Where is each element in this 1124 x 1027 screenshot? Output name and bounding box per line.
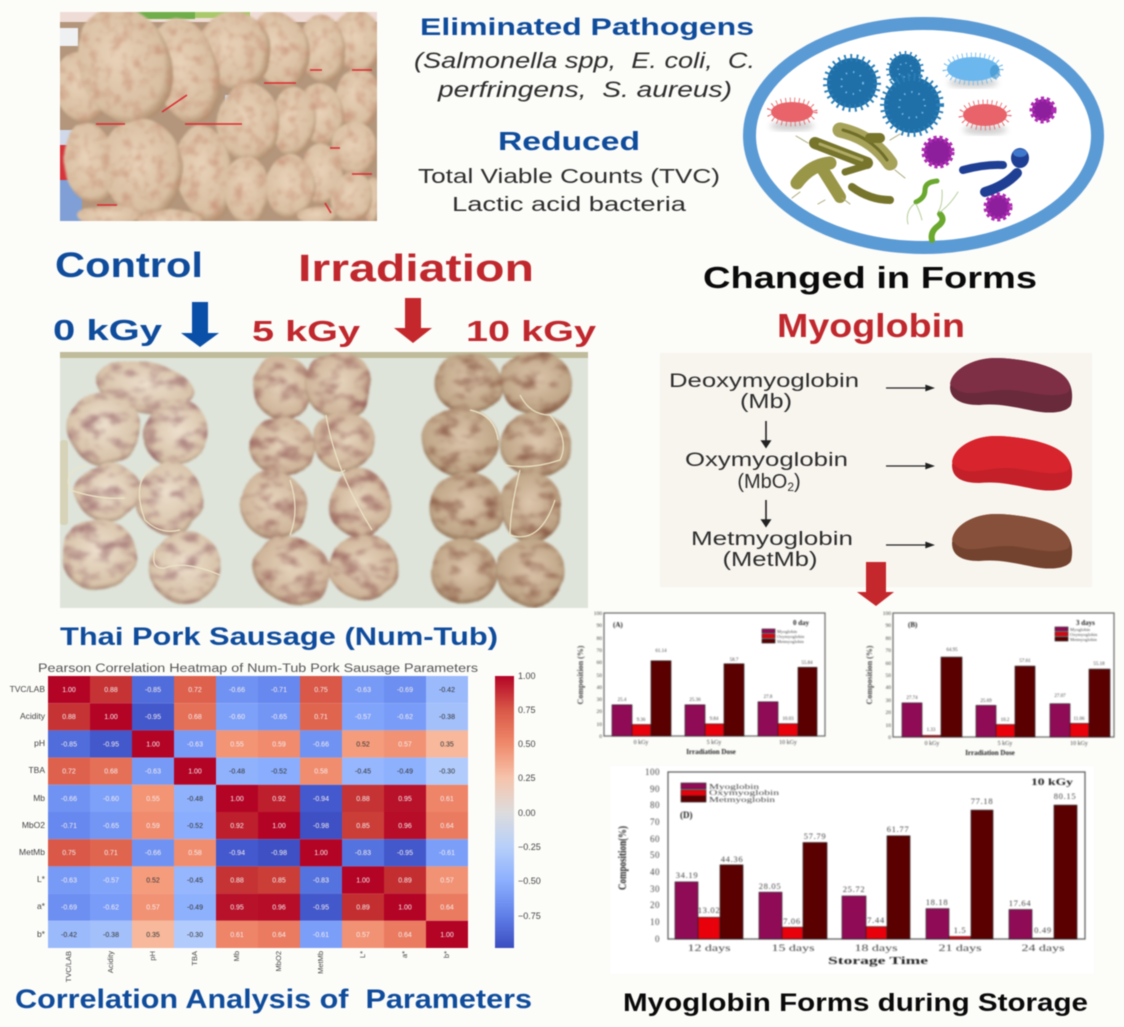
chart: correlation heatmap: 1.00 — [314, 850, 328, 857]
arrow: red down — [394, 298, 432, 343]
chart D: storage time composition: 24 days — [1022, 943, 1065, 953]
heatmap colour bar legend: 0.50 — [518, 739, 536, 749]
icon: dark blue bacteria — [963, 148, 1029, 192]
chart D: storage time composition: 25.72 — [843, 884, 865, 894]
label: 10 kGy: 10 kGy — [466, 316, 596, 348]
icon: red viruses — [770, 102, 1007, 135]
chart D: storage time composition: 61.77 — [887, 824, 909, 834]
chart B: 3 days composition: 60 — [886, 661, 891, 667]
chart D: storage time composition: 80.15 — [1054, 791, 1076, 801]
chart B: 3 days composition: 25.69 — [980, 699, 992, 704]
chart B: 3 days composition: 70 — [886, 648, 891, 654]
heading: myoglobin forms during storage: Myoglobin Forms during Storage — [623, 989, 1088, 1017]
heatmap colour bar legend: 0.00 — [518, 808, 536, 818]
heading: reduced text block: Reduced — [498, 126, 640, 156]
chart A: 0 day composition: 70 — [596, 648, 602, 654]
chart: correlation heatmap: -0.52 — [271, 769, 287, 776]
chart B: 3 days composition: 0 — [888, 735, 891, 741]
chart: correlation heatmap: -0.52 — [187, 823, 203, 830]
arrow: Mb to MbO2 — [762, 421, 770, 447]
heatmap row labels: Mb — [33, 793, 45, 803]
heatmap colour bar legend: 1.00 — [518, 671, 536, 681]
chart A: 0 day composition: 25.36 — [689, 698, 701, 703]
chart: correlation heatmap: -0.65 — [271, 714, 287, 721]
chart A: 0 day composition: 9.84 — [710, 717, 719, 722]
chart: correlation heatmap: -0.65 — [103, 823, 119, 830]
icon: red meat cut — [952, 436, 1072, 491]
chart: correlation heatmap: -0.48 — [187, 796, 203, 803]
chart A: 0 day composition: 5 kGy — [707, 740, 721, 746]
chart: correlation heatmap: 0.72 — [188, 687, 202, 694]
chart: correlation heatmap: -0.95 — [103, 741, 119, 748]
heatmap colour bar legend: 0.75 — [518, 705, 536, 715]
chart B: 3 days composition: 80 — [886, 636, 891, 642]
heatmap column labels: a* — [400, 951, 409, 958]
chart: correlation heatmap: 0.55 — [230, 741, 244, 748]
heatmap column labels: pH — [148, 951, 157, 961]
chart A: 0 day composition: 20 — [596, 709, 602, 715]
heatmap colour bar legend: −0.75 — [518, 911, 541, 921]
chart D: storage time composition: 70 — [650, 817, 660, 827]
photo: sausages on board at three doses — [60, 351, 588, 618]
chart D: storage time composition: 12 days — [688, 943, 731, 953]
chart B: 3 days composition: 30 — [886, 698, 891, 704]
heading: eliminated pathogens text block: Eliminated Pathogens — [420, 14, 754, 41]
heatmap column labels: MetMb — [316, 951, 325, 974]
chart: correlation heatmap: 0.89 — [398, 877, 412, 884]
chart: correlation heatmap: 1.00 — [440, 932, 454, 939]
chart: correlation heatmap: -0.61 — [313, 932, 329, 939]
chart B: 3 days composition: 10.2 — [1001, 718, 1010, 723]
chart A: 0 day composition: 10 — [596, 722, 602, 728]
label: metmyoglobin: Metmyoglobin — [691, 529, 853, 550]
chart D: storage time composition: 13.02 — [698, 905, 720, 915]
chart: correlation heatmap: 1.00 — [188, 769, 202, 776]
chart: correlation heatmap: -0.83 — [355, 850, 371, 857]
chart B: 3 days composition: 40 — [886, 685, 891, 691]
chart: correlation heatmap: -0.63 — [61, 877, 77, 884]
heading: eliminated pathogens text block: perfringens, S. aureus) — [437, 77, 732, 102]
legend B — [1055, 627, 1098, 642]
heatmap row labels: b* — [37, 929, 46, 939]
chart: correlation heatmap: -0.57 — [355, 714, 371, 721]
heading: correlation analysis: Correlation Analysis of Parameters — [15, 984, 532, 1014]
chart A: 0 day composition: 10.03 — [782, 717, 794, 722]
legend A: Metmyoglobin — [777, 639, 804, 644]
chart: correlation heatmap: -0.48 — [229, 769, 245, 776]
chart: correlation heatmap: 0.88 — [104, 687, 118, 694]
chart: correlation heatmap: 1.00 — [272, 823, 286, 830]
chart: correlation heatmap: -0.30 — [439, 769, 455, 776]
chart A: 0 day composition: 60 — [596, 660, 602, 666]
chart A: 0 day composition: (A) — [613, 621, 623, 629]
chart A: 0 day composition: 25.4 — [618, 698, 627, 703]
chart B: 3 days composition: 55.18 — [1093, 662, 1105, 667]
chart: correlation heatmap: -0.71 — [61, 823, 77, 830]
chart D: storage time composition: 18 days — [854, 943, 898, 953]
chart D: storage time composition: 7.06 — [783, 916, 801, 926]
chart: correlation heatmap: 0.71 — [314, 714, 328, 721]
chart D: storage time composition: 80 — [650, 800, 660, 810]
chart A: 0 day composition: 27.8 — [764, 695, 773, 700]
icon: purple viruses — [924, 99, 1054, 219]
icon: olive bacteria — [792, 130, 905, 204]
chart: correlation heatmap: -0.98 — [313, 823, 329, 830]
chart: correlation heatmap: 0.88 — [62, 714, 76, 721]
chart: correlation heatmap: -0.62 — [103, 905, 119, 912]
label: oxymyoglobin: Oxymyoglobin — [685, 450, 848, 471]
chart: correlation heatmap: -0.66 — [145, 850, 161, 857]
heatmap colour bar legend — [495, 671, 541, 948]
chart: correlation heatmap: -0.60 — [229, 714, 245, 721]
legend A: Myoglobin — [777, 629, 798, 634]
chart D: storage time composition: 90 — [650, 784, 660, 794]
chart D: storage time composition — [610, 766, 1094, 974]
chart: correlation heatmap: -0.45 — [355, 769, 371, 776]
chart: correlation heatmap: 1.00 — [62, 687, 76, 694]
chart: correlation heatmap: 0.52 — [356, 741, 370, 748]
chart: correlation heatmap: 0.95 — [230, 905, 244, 912]
legend D — [681, 783, 780, 804]
chart: correlation heatmap: 0.55 — [146, 796, 160, 803]
sausages: 10 kGy — [423, 351, 572, 606]
heatmap row labels: TBA — [28, 765, 45, 775]
chart: correlation heatmap: -0.71 — [271, 687, 287, 694]
chart D: storage time composition: 17.64 — [1009, 898, 1031, 908]
heatmap column labels: TVC/LAB — [64, 951, 73, 982]
chart A: 0 day composition: Composition (%) — [576, 645, 585, 704]
label: control: Control — [55, 246, 203, 285]
chart: correlation heatmap: -0.30 — [187, 932, 203, 939]
heatmap column labels: L* — [358, 951, 367, 958]
chart: correlation heatmap: 1.00 — [146, 741, 160, 748]
heatmap column labels: Mb — [232, 951, 241, 961]
chart: correlation heatmap: -0.49 — [397, 769, 413, 776]
label: 5 kGy: 5 kGy — [252, 316, 360, 348]
chart B: 3 days composition: 10 kGy — [1070, 741, 1088, 747]
chart: correlation heatmap: 0.57 — [398, 741, 412, 748]
chart B: 3 days composition: 90 — [886, 623, 891, 629]
chart D: storage time composition: 30 — [650, 884, 660, 894]
heatmap row labels — [10, 684, 46, 939]
icon: blue viruses — [827, 54, 940, 133]
chart: correlation heatmap: -0.95 — [397, 850, 413, 857]
chart: correlation heatmap: -0.49 — [187, 905, 203, 912]
chart B: 3 days composition — [865, 611, 1114, 757]
chart A: 0 day composition: 80 — [596, 636, 602, 642]
arrow: blue down — [181, 302, 219, 347]
label: metmyoglobin — [691, 529, 853, 571]
heatmap title: Pearson Correlation Heatmap of Num-Tub Pork Sausage Parameters — [38, 663, 478, 675]
chart: correlation heatmap: -0.66 — [229, 687, 245, 694]
chart D: storage time composition: 15 days — [772, 943, 815, 953]
label: deoxymyoglobin — [669, 371, 859, 413]
chart B: 3 days composition: Irradiation Dose — [965, 749, 1015, 757]
chart: correlation heatmap: 0.61 — [440, 796, 454, 803]
chart A: 0 day composition: 100 — [594, 611, 602, 617]
chart A: 0 day composition: 61.14 — [655, 649, 667, 654]
label: oxymyoglobin: (MbO — [737, 471, 787, 493]
chart: correlation heatmap: 1.00 — [104, 714, 118, 721]
chart: correlation heatmap: 0.58 — [188, 850, 202, 857]
legend D: Myoglobin — [709, 783, 760, 791]
chart: correlation heatmap: 0.64 — [398, 932, 412, 939]
chart: correlation heatmap: 0.57 — [356, 932, 370, 939]
chart A: 0 day composition: 0 kGy — [634, 740, 648, 746]
icon: brown meat cut — [952, 514, 1072, 569]
label: irradiation: Irradiation — [298, 248, 534, 290]
chart: correlation heatmap: 0.72 — [62, 769, 76, 776]
chart D: storage time composition: 0.49 — [1034, 925, 1052, 935]
chart B: 3 days composition: 64.95 — [946, 648, 958, 653]
icon: light blue virus — [947, 57, 1000, 88]
heatmap colour bar legend: −0.50 — [518, 876, 541, 886]
chart B: 3 days composition: 0 kGy — [925, 741, 939, 747]
chart: correlation heatmap: 0.59 — [272, 741, 286, 748]
chart: correlation heatmap: -0.63 — [145, 769, 161, 776]
chart: correlation heatmap: 0.75 — [314, 687, 328, 694]
chart: correlation heatmap: 0.68 — [104, 769, 118, 776]
chart D: storage time composition: 0 — [655, 934, 660, 944]
chart: correlation heatmap: 0.58 — [314, 769, 328, 776]
heatmap colour bar legend: 0.25 — [518, 773, 536, 783]
icon: green flagellated bacteria — [907, 181, 958, 240]
heatmap column labels — [64, 951, 451, 982]
sausages: control — [61, 354, 221, 604]
chart: correlation heatmap: -0.94 — [229, 850, 245, 857]
heading: reduced text block — [418, 126, 720, 216]
chart: correlation heatmap: 0.64 — [440, 905, 454, 912]
chart B: 3 days composition: (B) — [908, 621, 918, 629]
label: oxymyoglobin: 2 — [787, 480, 794, 494]
chart: correlation heatmap: 0.85 — [272, 877, 286, 884]
chart A: 0 day composition: 90 — [596, 623, 602, 629]
heatmap row labels: MetMb — [19, 847, 45, 857]
chart: correlation heatmap: -0.85 — [61, 741, 77, 748]
chart B: 3 days composition: 27.74 — [906, 696, 918, 701]
chart: correlation heatmap: -0.63 — [355, 687, 371, 694]
heatmap row labels: TVC/LAB — [10, 684, 45, 694]
chart: correlation heatmap: 0.85 — [356, 823, 370, 830]
chart B: 3 days composition: 57.61 — [1019, 659, 1031, 664]
chart: correlation heatmap: 0.61 — [230, 932, 244, 939]
heatmap column labels: TBA — [190, 951, 199, 966]
chart: correlation heatmap: -0.66 — [313, 741, 329, 748]
chart: correlation heatmap: -0.38 — [103, 932, 119, 939]
chart B: 3 days composition: 11.06 — [1073, 717, 1085, 722]
heatmap row labels: pH — [34, 738, 45, 748]
chart D: storage time composition: 20 — [650, 900, 660, 910]
chart: correlation heatmap: -0.62 — [397, 714, 413, 721]
legend A — [762, 629, 805, 644]
chart: correlation heatmap — [48, 676, 468, 948]
heatmap row labels: Acidity — [20, 711, 46, 721]
heatmap row labels: a* — [37, 901, 46, 911]
chart: correlation heatmap: -0.83 — [313, 877, 329, 884]
chart B: 3 days composition: 27.07 — [1054, 694, 1066, 699]
chart: correlation heatmap: -0.45 — [187, 877, 203, 884]
legend D: Oxymyoglobin — [709, 789, 780, 797]
chart: correlation heatmap: 0.59 — [146, 823, 160, 830]
chart: correlation heatmap: 0.71 — [104, 850, 118, 857]
chart: correlation heatmap: 0.52 — [146, 877, 160, 884]
chart: correlation heatmap: -0.94 — [313, 796, 329, 803]
chart D: storage time composition: 1.5 — [954, 925, 966, 935]
chart: correlation heatmap: -0.60 — [103, 796, 119, 803]
chart A: 0 day composition — [576, 611, 825, 756]
label: deoxymyoglobin: (Mb) — [740, 391, 792, 413]
heatmap column labels: MbO2 — [274, 951, 283, 971]
chart A: 0 day composition: Irradiation Dose — [686, 748, 736, 756]
heading: myoglobin: Myoglobin — [777, 307, 965, 344]
chart D: storage time composition: 100 — [645, 767, 660, 777]
legend A: Oxymyoglobin — [777, 634, 805, 639]
chart D: storage time composition: 10 kGy — [1031, 777, 1074, 787]
chart B: 3 days composition: 50 — [886, 673, 891, 679]
chart: correlation heatmap: 0.35 — [440, 741, 454, 748]
chart: correlation heatmap: 0.95 — [398, 796, 412, 803]
arrows: form to meat colour — [886, 386, 933, 548]
bars A — [612, 661, 817, 736]
chart B: 3 days composition: 20 — [886, 710, 891, 716]
chart A: 0 day composition: 10 kGy — [779, 740, 797, 746]
chart B: 3 days composition: 1.33 — [927, 728, 936, 733]
chart: correlation heatmap: 0.75 — [62, 850, 76, 857]
chart D: storage time composition: 44.36 — [721, 854, 743, 864]
chart: correlation heatmap: -0.61 — [439, 850, 455, 857]
panel: myoglobin forms — [660, 353, 1092, 587]
chart D: storage time composition: 40 — [650, 867, 660, 877]
chart: correlation heatmap: -0.85 — [145, 687, 161, 694]
chart: correlation heatmap: 0.64 — [440, 823, 454, 830]
heatmap row labels: MbO2 — [22, 820, 45, 830]
chart: correlation heatmap: 0.88 — [230, 877, 244, 884]
chart A: 0 day composition: 0 day — [793, 619, 810, 627]
chart: correlation heatmap: 0.88 — [356, 796, 370, 803]
chart: correlation heatmap: 0.35 — [146, 932, 160, 939]
chart: correlation heatmap: -0.63 — [187, 741, 203, 748]
heatmap colour bar legend: −0.25 — [518, 842, 541, 852]
arrow: red down to charts — [857, 562, 894, 606]
chart: correlation heatmap: 0.57 — [146, 905, 160, 912]
chart: correlation heatmap: -0.98 — [271, 850, 287, 857]
heatmap row labels: L* — [37, 874, 46, 884]
chart B: 3 days composition: 5 kGy — [998, 741, 1012, 747]
chart: correlation heatmap: 0.96 — [398, 823, 412, 830]
bars B — [902, 657, 1110, 737]
chart: correlation heatmap: 0.92 — [272, 796, 286, 803]
chart: correlation heatmap: 1.00 — [398, 905, 412, 912]
chart A: 0 day composition: 0 — [599, 734, 602, 740]
chart A: 0 day composition: 30 — [596, 697, 602, 703]
chart: correlation heatmap: 0.57 — [440, 877, 454, 884]
chart D: storage time composition: 60 — [650, 834, 660, 844]
chart: correlation heatmap: -0.42 — [439, 687, 455, 694]
chart D: storage time composition: 57.79 — [804, 831, 826, 841]
heatmap column labels: Acidity — [106, 951, 115, 973]
chart: correlation heatmap: -0.66 — [61, 796, 77, 803]
chart: correlation heatmap: -0.69 — [397, 687, 413, 694]
heading: reduced text block: Total Viable Counts (TVC) — [418, 166, 720, 188]
legend D: Metmyoglobin — [709, 796, 776, 804]
chart B: 3 days composition: 3 days — [1076, 619, 1095, 627]
heading: Thai pork sausage: Thai Pork Sausage (Num-Tub) — [60, 623, 498, 651]
chart D: storage time composition: 28.05 — [759, 881, 781, 891]
chart A: 0 day composition: 50 — [596, 673, 602, 679]
sausages: 5 kGy — [240, 351, 409, 618]
heading: eliminated pathogens text block — [414, 14, 755, 102]
heading: changed in forms: Changed in Forms — [703, 260, 1037, 295]
chart: correlation heatmap: -0.95 — [313, 905, 329, 912]
label: oxymyoglobin: ) — [794, 471, 801, 493]
chart A: 0 day composition: 58.7 — [730, 658, 739, 663]
chart D: storage time composition: 21 days — [938, 943, 982, 953]
chart: correlation heatmap: -0.69 — [61, 905, 77, 912]
icon: petri dish with microbes — [750, 24, 1098, 248]
chart D: storage time composition: Composition(%) — [615, 826, 629, 890]
chart: correlation heatmap: 0.64 — [272, 932, 286, 939]
chart: correlation heatmap: 0.89 — [356, 905, 370, 912]
chart: correlation heatmap: -0.42 — [61, 932, 77, 939]
chart: correlation heatmap: 0.96 — [272, 905, 286, 912]
chart A: 0 day composition: 55.84 — [801, 661, 813, 666]
chart B: 3 days composition: 100 — [883, 611, 891, 617]
legend B: Metmyoglobin — [1070, 637, 1097, 642]
chart: correlation heatmap: -0.38 — [439, 714, 455, 721]
chart B: 3 days composition: Composition (%) — [865, 645, 874, 704]
chart: correlation heatmap: -0.95 — [145, 714, 161, 721]
photo: Num-Tub sausages hanging — [59, 11, 378, 222]
chart A: 0 day composition: 9.36 — [637, 718, 646, 723]
label: oxymyoglobin — [685, 450, 848, 494]
chart D: storage time composition: 50 — [650, 850, 660, 860]
chart: correlation heatmap: 0.92 — [230, 823, 244, 830]
chart B: 3 days composition: 10 — [886, 723, 891, 729]
legend B: Oxymyoglobin — [1070, 632, 1098, 637]
chart D: storage time composition: 34.19 — [676, 870, 698, 880]
label: 0 kGy: 0 kGy — [53, 315, 162, 347]
chart D: storage time composition: 77.18 — [971, 796, 993, 806]
arrow: MbO2 to MetMb — [762, 500, 770, 526]
chart D: storage time composition: 10 — [650, 917, 660, 927]
chart D: storage time composition: 18.18 — [926, 897, 948, 907]
heading: eliminated pathogens text block: (Salmonella spp, E. coli, C. — [414, 48, 755, 73]
legend B: Myoglobin — [1070, 627, 1091, 632]
label: deoxymyoglobin: Deoxymyoglobin — [669, 371, 859, 392]
chart A: 0 day composition: 40 — [596, 685, 602, 691]
chart: correlation heatmap: 0.68 — [188, 714, 202, 721]
chart: correlation heatmap: 1.00 — [356, 877, 370, 884]
icon: purple meat cut — [950, 358, 1072, 413]
bars D — [675, 805, 1077, 939]
chart: correlation heatmap: 1.00 — [230, 796, 244, 803]
chart D: storage time composition: (D) — [680, 810, 692, 820]
chart D: storage time composition: Storage Time — [828, 956, 929, 967]
heading: reduced text block: Lactic acid bacteria — [452, 194, 687, 216]
label: metmyoglobin: (MetMb) — [722, 549, 818, 571]
chart: correlation heatmap: -0.57 — [103, 877, 119, 884]
heatmap column labels: b* — [442, 951, 451, 958]
chart D: storage time composition: 7.44 — [867, 915, 885, 925]
